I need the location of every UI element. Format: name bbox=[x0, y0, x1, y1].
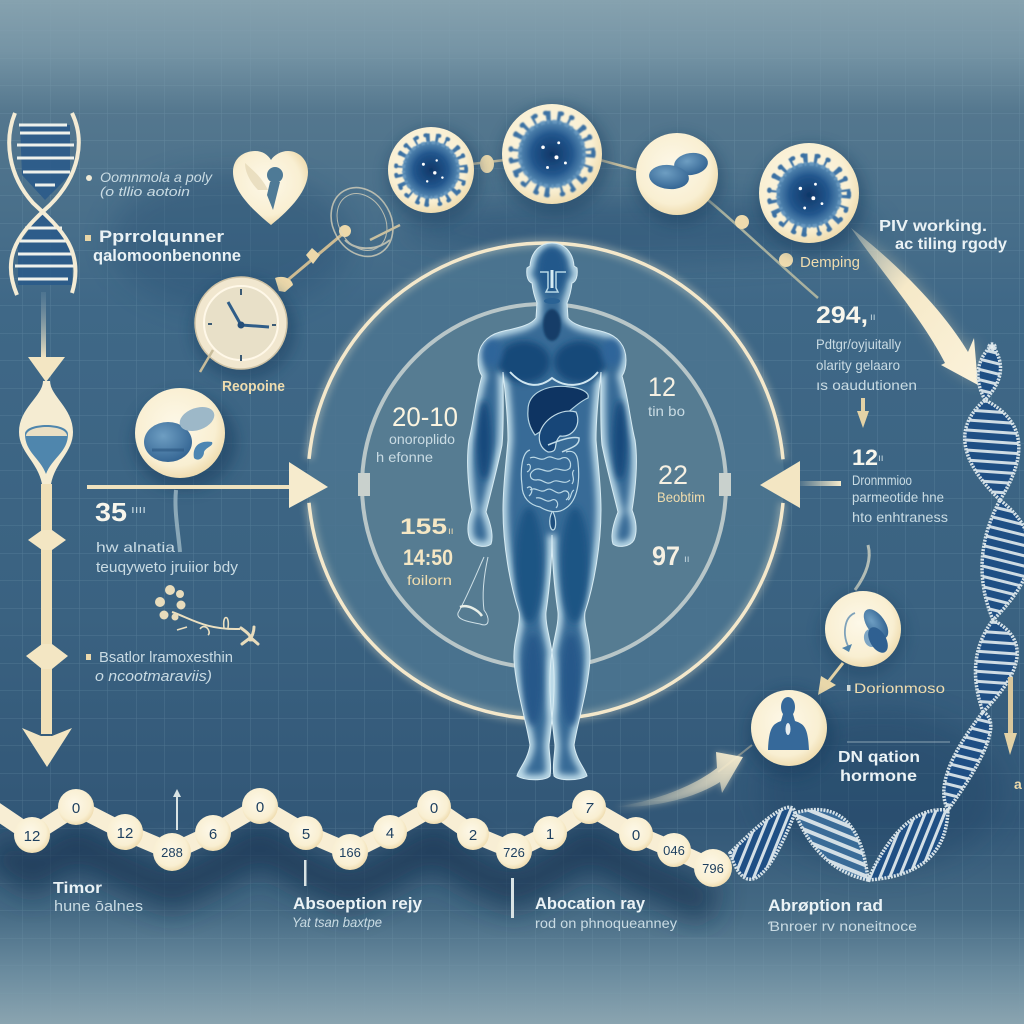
label: Reopoine bbox=[200, 350, 285, 395]
label: Dorionmoso: Dorionmoso bbox=[854, 680, 945, 696]
arrow: right vertical: a bbox=[1014, 776, 1022, 792]
label: Absorption rate 2: rod on phnoqueanney bbox=[535, 915, 677, 931]
node: 7 bbox=[572, 790, 606, 824]
node: 5: 5 bbox=[302, 826, 310, 843]
icon: hourglass bbox=[19, 381, 73, 484]
label: DN qation hormone bbox=[838, 742, 950, 785]
label: Absorption rate 2: Abocation ray bbox=[535, 894, 646, 913]
left DNA helix bbox=[9, 113, 79, 295]
text: top left notes: (o tllio aotoin bbox=[100, 184, 190, 199]
icon: heart with keyhole bbox=[233, 151, 308, 225]
node: 0 third: 0 bbox=[430, 800, 438, 817]
label: 20-10: onoroplido bbox=[389, 431, 455, 447]
node: 726: 726 bbox=[503, 845, 525, 860]
right DNA helix bbox=[730, 344, 1024, 880]
icon: botanical sprig bbox=[155, 585, 258, 644]
node: 796: 796 bbox=[702, 861, 724, 876]
label: 35 bbox=[95, 497, 239, 576]
label: 12 tin bo: tin bo bbox=[648, 403, 685, 419]
node: 5 bbox=[289, 816, 323, 850]
icon: virus circle 3 bbox=[756, 143, 866, 254]
label: Absorption rate 3: Ɓnroer rv noneitnoce bbox=[768, 918, 917, 934]
label: Demping: Demping bbox=[800, 254, 860, 271]
text: lower left note: Bsatlor lramoxesthin bbox=[99, 649, 233, 666]
label: DN qation hormone: hormone bbox=[840, 768, 917, 785]
node: 12 bbox=[14, 817, 50, 853]
label: 12 tin bo bbox=[648, 372, 685, 419]
node: 2: 2 bbox=[469, 827, 477, 844]
connector: clock to ring icon bbox=[275, 225, 351, 292]
node: 046: 046 bbox=[663, 843, 685, 858]
node: 046 bbox=[657, 833, 691, 867]
node: 0: 0 bbox=[72, 800, 80, 817]
label: 35: teuqyweto jruiior bdy bbox=[96, 559, 239, 576]
label: 97: 97 bbox=[652, 541, 680, 571]
node: 0 fourth bbox=[619, 817, 653, 851]
text block: 12 Dronmmioo: parmeotide hne bbox=[852, 489, 944, 505]
organs: intestines bbox=[521, 450, 579, 530]
label: 155 and 14:50: foilorn bbox=[407, 572, 452, 588]
arrow: left into ring bbox=[87, 462, 328, 552]
node: 288: 288 bbox=[161, 845, 183, 860]
label: Timer: hune ōalnes bbox=[54, 898, 143, 915]
node: 166 bbox=[332, 834, 368, 870]
small indicators under chain bbox=[173, 789, 514, 918]
text: top left notes: qalomoonbenonne bbox=[93, 246, 241, 265]
node: 726 bbox=[496, 833, 532, 869]
node: 6: 6 bbox=[209, 826, 217, 843]
label: Absorption rate 3: Abrøption rad bbox=[768, 896, 883, 915]
face bbox=[540, 270, 566, 304]
arrow: chain to person circle bbox=[615, 745, 752, 807]
label: Reopoine: Reopoine bbox=[222, 378, 285, 395]
node: 6 bbox=[195, 815, 231, 851]
icon: ring outline bbox=[319, 176, 405, 268]
text: lower left note bbox=[86, 649, 233, 685]
node: 288 bbox=[153, 833, 191, 871]
node: 4: 4 bbox=[386, 825, 394, 842]
node: 7: 7 bbox=[585, 800, 594, 817]
node: 1: 1 bbox=[546, 826, 554, 843]
icon: pills circle lower right bbox=[820, 545, 906, 677]
label: Absorption rate 1: Absoeption rejy bbox=[293, 894, 423, 913]
node: 0 second: 0 bbox=[256, 799, 264, 816]
arrow: DNA to hourglass bbox=[28, 292, 65, 382]
icon: foot outline bbox=[458, 557, 488, 625]
label: Absorption rate 2 bbox=[535, 894, 677, 931]
node: 12 second: 12 bbox=[117, 825, 133, 842]
label: 155 and 14:50: 14:50 bbox=[403, 545, 453, 570]
label: 22 Beobtim: 22 bbox=[658, 460, 688, 490]
label: 155 and 14:50 bbox=[400, 514, 454, 588]
text: lower left note: o ncootmaraviis) bbox=[95, 668, 212, 685]
text: top left notes: Oomnmola a poly bbox=[100, 169, 213, 185]
node: 1 bbox=[533, 816, 567, 850]
arrow: pill to person bbox=[818, 663, 843, 695]
text block: 12 Dronmmioo: ıı bbox=[878, 453, 884, 464]
label: 20-10: 20-10 bbox=[392, 402, 458, 432]
text block: 294 bbox=[816, 302, 917, 393]
label: 22 Beobtim bbox=[657, 460, 705, 505]
label: 20-10 bbox=[376, 402, 458, 465]
label: 35: ıııı bbox=[131, 504, 146, 516]
human body bbox=[460, 240, 645, 785]
label: PIV working: ac tiling rgody bbox=[895, 236, 1007, 253]
text: top left notes bbox=[85, 169, 241, 265]
node: 166: 166 bbox=[339, 845, 361, 860]
icon: pills circle top bbox=[634, 133, 724, 225]
label: 12 tin bo: 12 bbox=[648, 372, 676, 402]
text block: 294: olarity gelaaro bbox=[816, 357, 900, 373]
icon: clock bbox=[192, 277, 296, 380]
label: 35: 35 bbox=[95, 497, 127, 527]
text block: 294: Pdtgr/oyjuitally bbox=[816, 336, 901, 352]
timeline chain bbox=[0, 788, 732, 906]
organs: liver and stomach bbox=[528, 386, 588, 452]
label: PIV working: PIV working. bbox=[879, 218, 987, 235]
node: 0 fourth: 0 bbox=[632, 827, 640, 844]
label: Absorption rate 3 bbox=[768, 896, 917, 934]
node: 12 second bbox=[107, 814, 143, 850]
node: 0 third bbox=[417, 790, 451, 824]
text block: 294: 294, bbox=[816, 302, 868, 329]
label: 155 and 14:50: 155 bbox=[400, 514, 447, 539]
arrow: small down arrow bbox=[857, 398, 869, 428]
label: PIV working bbox=[879, 218, 1007, 253]
text block: 12 Dronmmioo: 12 bbox=[852, 445, 878, 470]
label: DN qation hormone: DN qation bbox=[838, 749, 920, 766]
arrow: right vertical bbox=[1004, 677, 1022, 792]
text block: 12 Dronmmioo: hto enhtraness bbox=[852, 509, 948, 525]
connector: top arc between circles bbox=[370, 155, 818, 298]
label: Absorption rate 1 bbox=[292, 894, 423, 930]
icon: virus circle 1 bbox=[386, 127, 482, 224]
label: 97: ıı bbox=[684, 554, 690, 565]
label: Timer: Timor bbox=[53, 880, 102, 897]
node: 796 bbox=[694, 849, 732, 887]
label: 22 Beobtim: Beobtim bbox=[657, 489, 705, 505]
text: top left notes: Pprrolqunner bbox=[99, 227, 224, 246]
label: 20-10: h efonne bbox=[376, 449, 433, 465]
node: 2 bbox=[457, 818, 489, 850]
arrow: right into ring bbox=[760, 461, 841, 508]
node: 12: 12 bbox=[24, 828, 40, 845]
icon: virus circle 2 bbox=[500, 104, 610, 215]
text block: 12 Dronmmioo bbox=[852, 445, 948, 525]
central outer disc and ring bbox=[308, 243, 784, 719]
label: Timer bbox=[53, 880, 143, 915]
vertical timeline arrow bbox=[22, 484, 72, 767]
text block: 294: ıs oaudutionen bbox=[816, 377, 917, 393]
icon: pills circle bbox=[133, 388, 237, 490]
big curved arrow bbox=[851, 228, 978, 385]
text block: 12 Dronmmioo: Dronmmioo bbox=[852, 472, 912, 488]
node: 0 second bbox=[242, 788, 278, 824]
label: 35: hw alnatia bbox=[96, 539, 175, 555]
label: Absorption rate 1: Yat tsan baxtpe bbox=[292, 914, 382, 930]
label: 155 and 14:50: ıı bbox=[448, 526, 454, 537]
node: 0 bbox=[58, 789, 94, 825]
node: 4 bbox=[373, 815, 407, 849]
icon: person circle bbox=[747, 690, 835, 778]
text block: 294: ıı bbox=[870, 312, 876, 323]
